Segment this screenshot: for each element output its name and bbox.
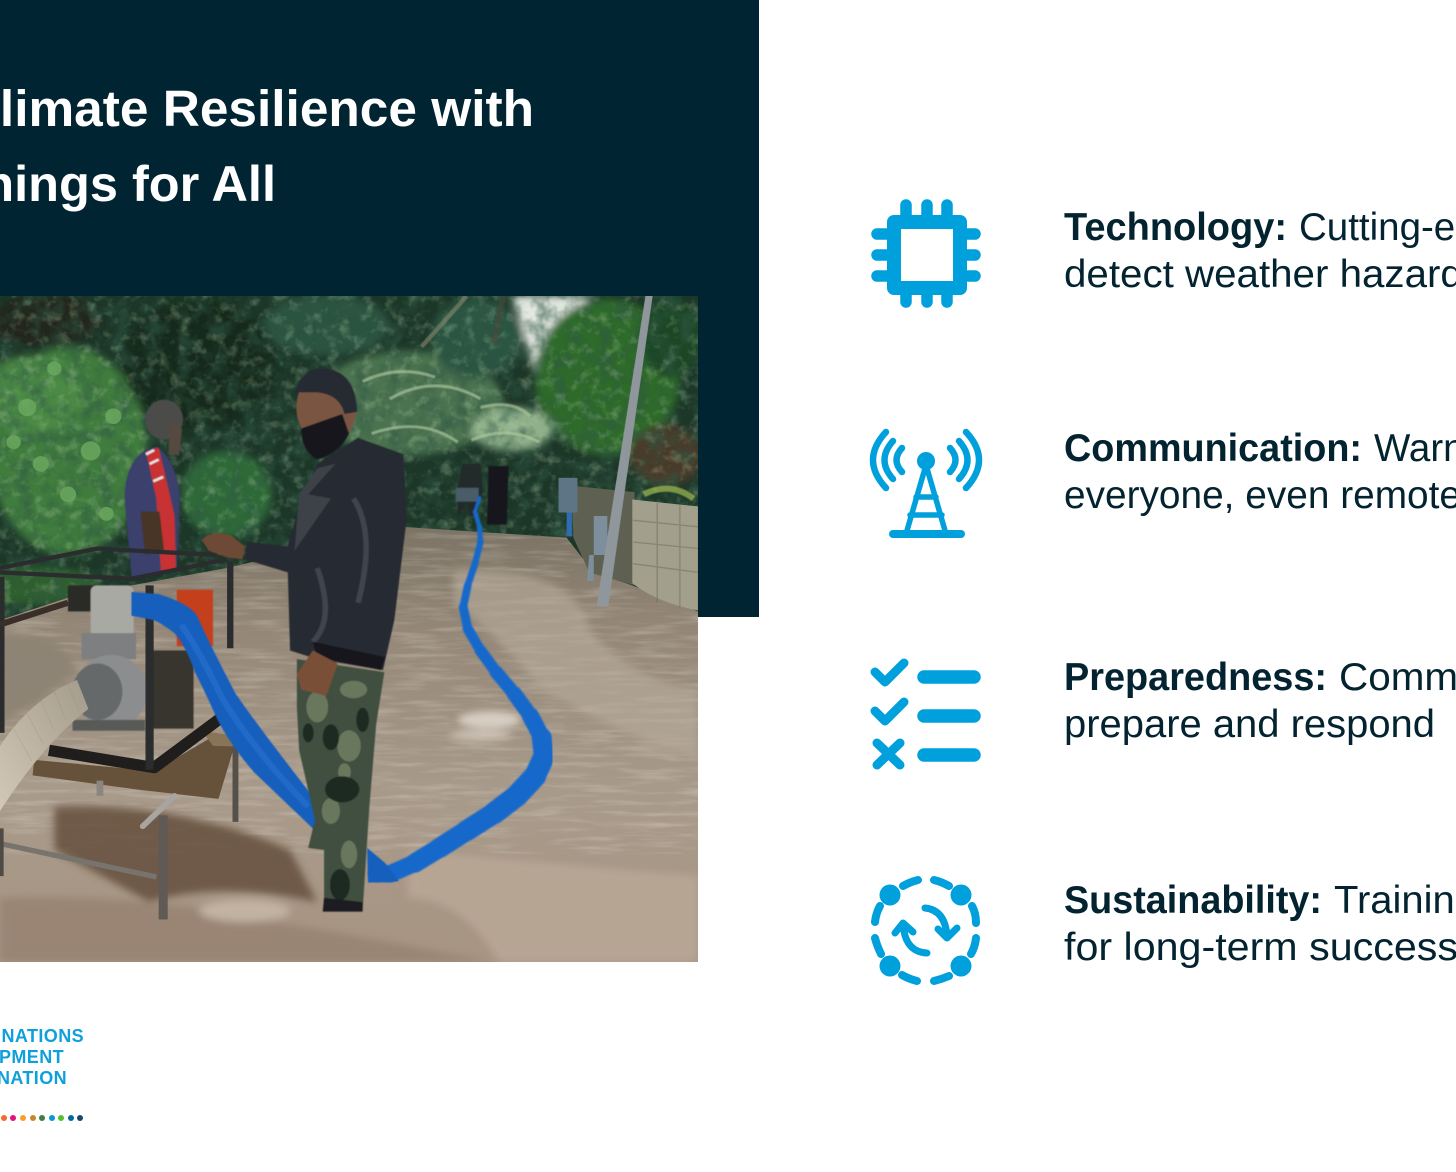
logo wordmark	[0, 1026, 84, 1088]
foliage background	[0, 295, 703, 643]
large blue hose from pump	[131, 592, 399, 883]
text: communication	[1064, 427, 1456, 517]
standing man with mask	[202, 368, 407, 912]
people in the distance	[456, 464, 509, 525]
icon: signal tower	[873, 432, 979, 534]
second man in striped shirt	[125, 400, 183, 577]
table under pump	[0, 718, 245, 919]
text: communication: everyone, even remote	[1064, 474, 1456, 517]
text: sustainability: Sustainability:	[1064, 879, 1322, 922]
title panel	[0, 0, 759, 617]
coloured dots	[0, 1115, 83, 1121]
text: sustainability: for long-term success	[1064, 926, 1456, 969]
text: preparedness: prepare and respond	[1064, 703, 1435, 746]
corrugated intake hose	[0, 680, 88, 811]
photo: man with water pump on flooded road	[0, 296, 698, 962]
text: technology	[1064, 206, 1456, 296]
text: technology: Technology:	[1064, 206, 1287, 249]
text: communication: Communication:	[1064, 427, 1362, 470]
icon: microchip	[877, 205, 975, 302]
text: technology: detect weather hazards	[1064, 253, 1456, 296]
organisation logo	[0, 1026, 84, 1121]
flooded road	[0, 527, 698, 962]
pump engine	[68, 585, 213, 731]
icon: sustainability cycle	[875, 880, 976, 981]
text: preparedness: Preparedness:	[1064, 656, 1327, 699]
text: sustainability	[1064, 879, 1456, 969]
title	[0, 79, 534, 212]
hand and arm	[202, 533, 245, 559]
head	[296, 369, 356, 446]
pump frame	[0, 549, 230, 770]
logo wordmark: NATIONS	[2, 1026, 84, 1046]
logo wordmark: PMENT	[0, 1047, 64, 1067]
text: preparedness	[1064, 656, 1456, 746]
wall	[558, 478, 698, 611]
trousers	[297, 659, 384, 911]
water reflections	[0, 525, 698, 963]
blue hose curving down road	[376, 498, 544, 874]
icon: checklist	[875, 663, 974, 765]
street pole	[596, 296, 653, 606]
jacket	[245, 438, 407, 670]
